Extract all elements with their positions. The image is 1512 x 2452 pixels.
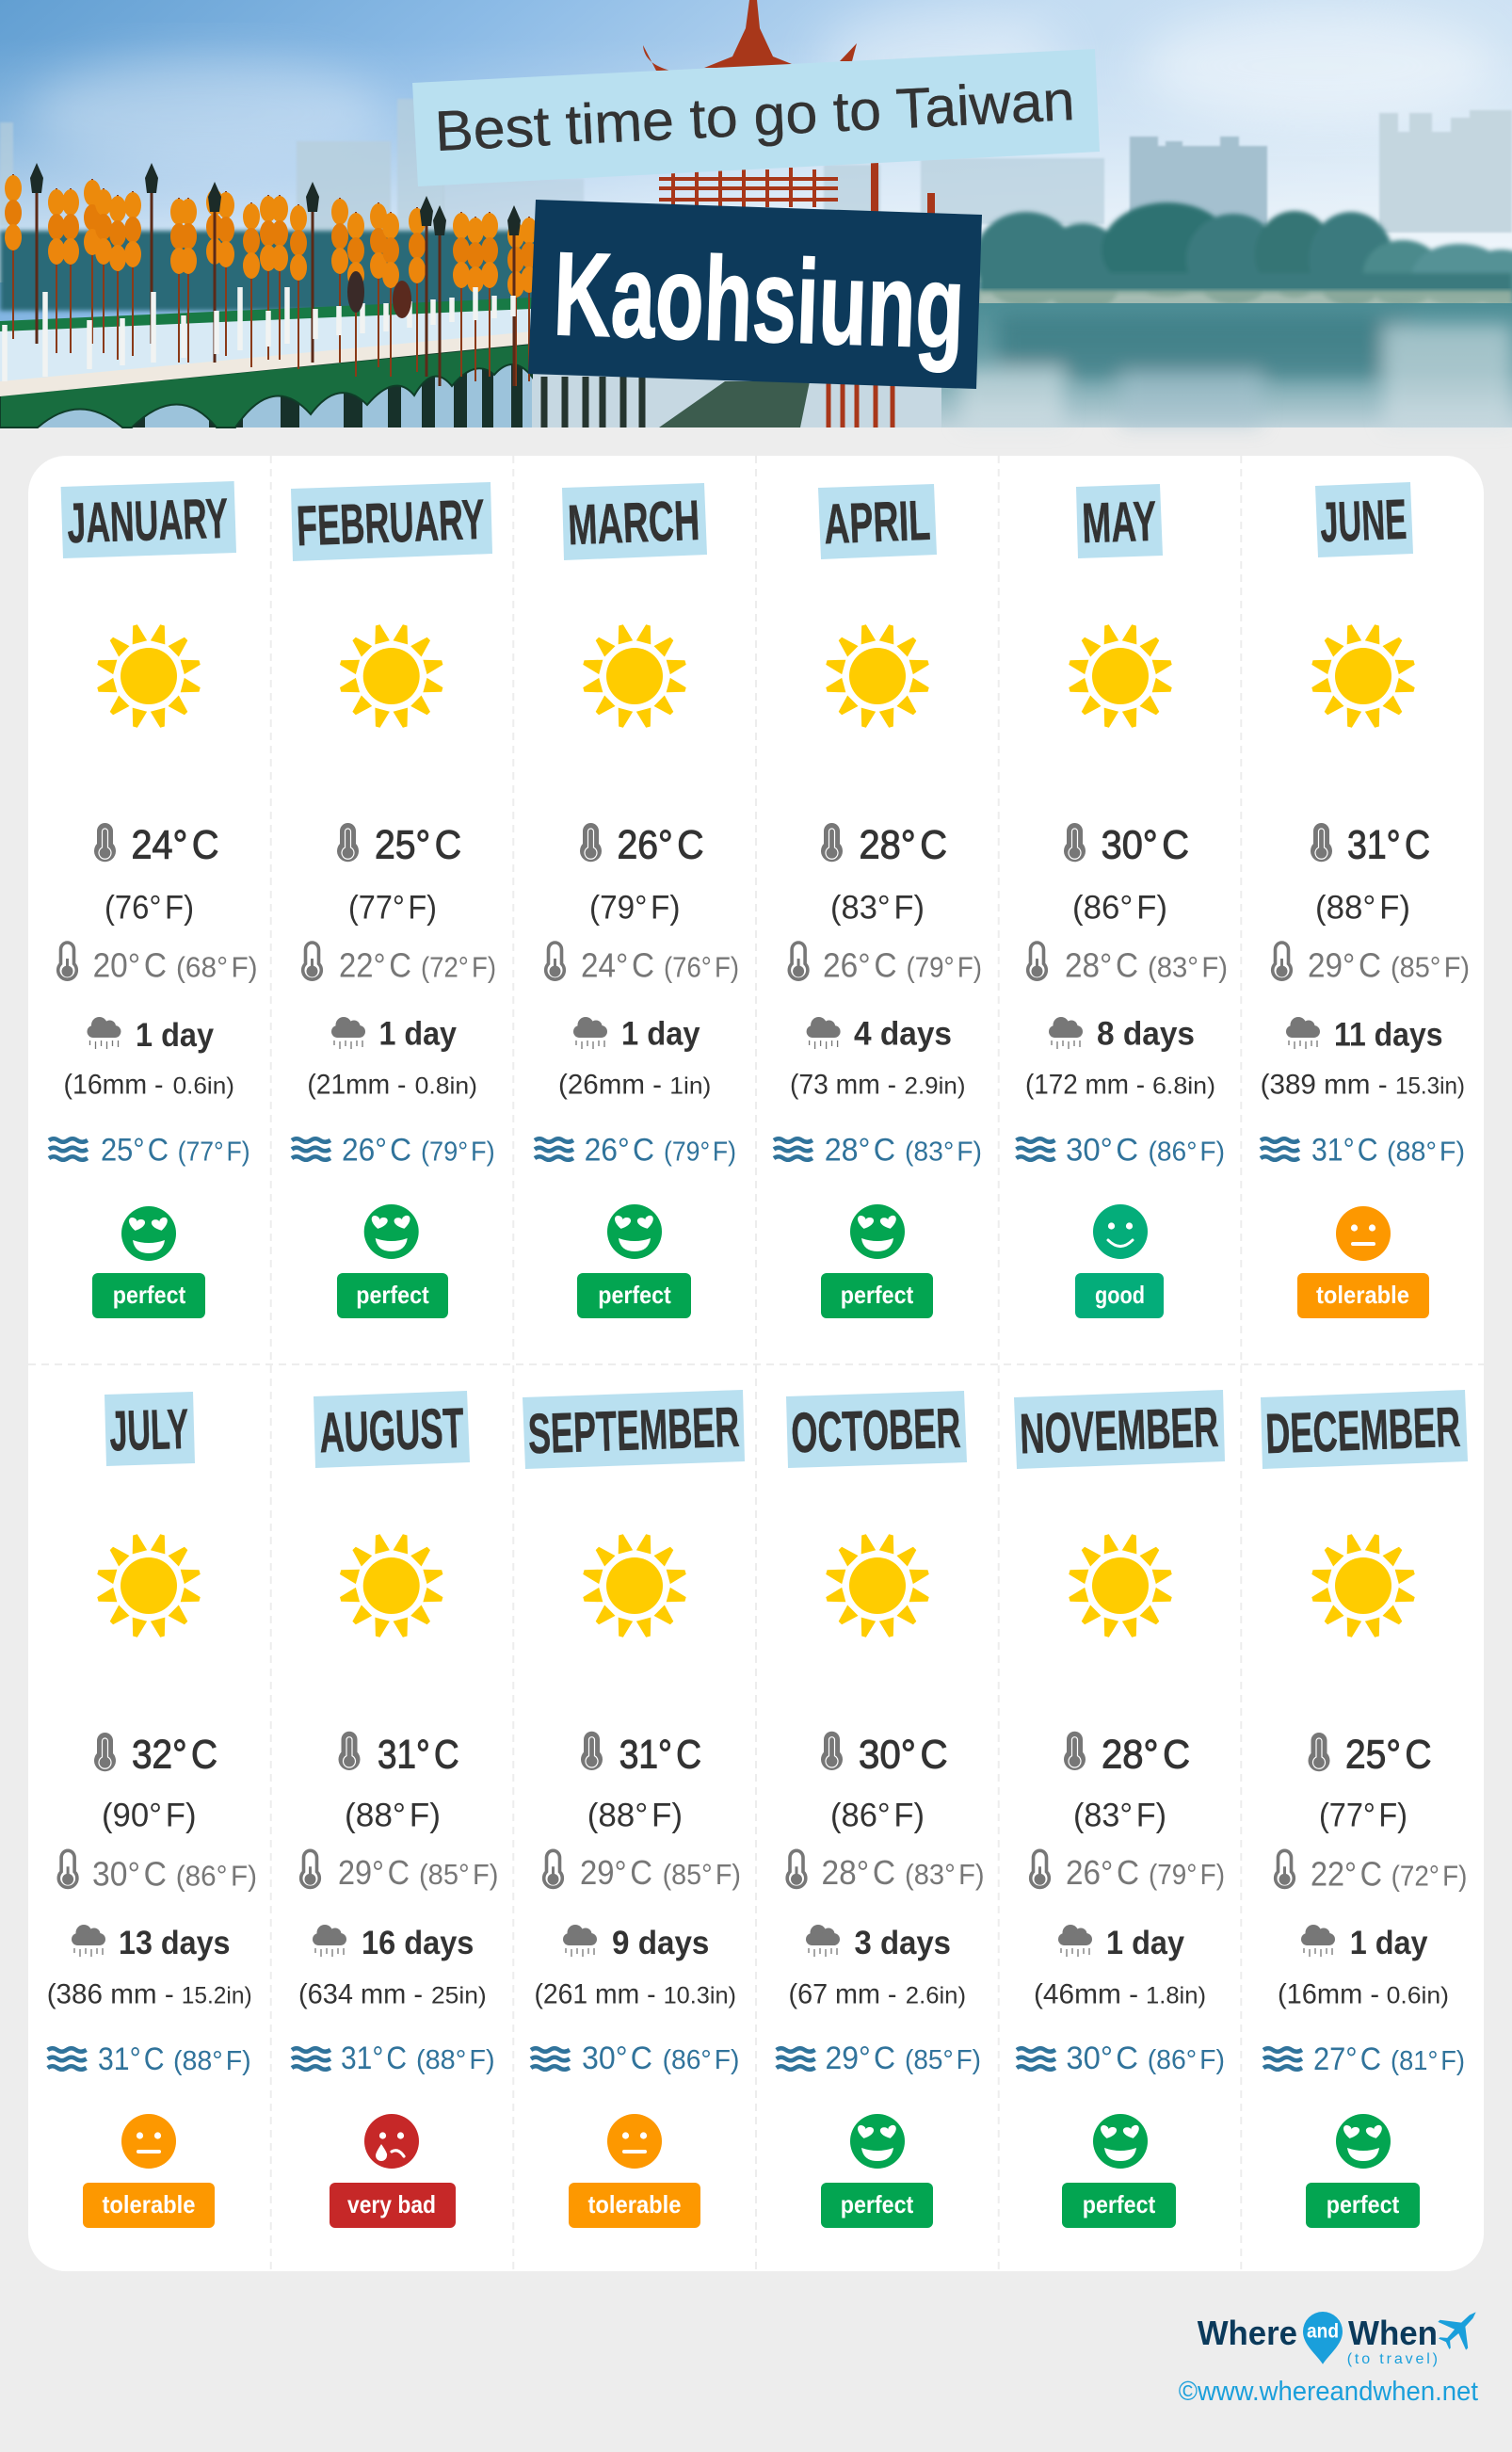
trees across the lake — [974, 202, 1512, 314]
title banner: Best time to go to Taiwan: Best time to go to Taiwan — [433, 69, 1076, 163]
rainfall: 0.6in) — [173, 1073, 234, 1100]
low temperature: 28° C — [821, 1853, 895, 1892]
rainfall — [535, 1979, 736, 2010]
high temperature: 28° C — [1102, 1733, 1190, 1778]
column: March — [535, 483, 739, 1318]
rating face: perfect — [121, 1206, 176, 1261]
rating face: perfect — [850, 1204, 905, 1259]
column: September — [523, 1390, 745, 2228]
low temperature — [58, 1850, 257, 1894]
rating badge: perfect: perfect — [841, 2190, 914, 2218]
rainfall: 6.8in) — [1152, 1073, 1215, 1100]
icon: sun — [1068, 1533, 1173, 1638]
water under the arched bridge — [0, 358, 532, 427]
high temperature: 25° C — [375, 823, 461, 868]
high temperature fahrenheit: (79° F) — [589, 889, 680, 927]
rating badge: tolerable — [1297, 1273, 1429, 1318]
rainfall — [1278, 1979, 1449, 2010]
railing posts — [5, 287, 513, 381]
rainfall: (389 mm - — [1261, 1070, 1388, 1101]
sea temperature — [535, 1133, 736, 1169]
high temperature — [1064, 823, 1189, 868]
sea temperature: 26° C — [342, 1133, 411, 1169]
rainy days: 11 days — [1334, 1017, 1442, 1054]
month: February — [291, 482, 492, 561]
high temperature — [339, 1732, 459, 1778]
sea temperature: (88° F) — [173, 2046, 251, 2076]
low temperature: 30° C — [92, 1855, 167, 1894]
low temperature: 28° C — [1065, 945, 1138, 985]
rainy days — [1301, 1925, 1428, 1961]
month: February: FEBRUARY — [296, 488, 486, 557]
low temperature: 22° C — [1311, 1855, 1382, 1894]
month: September: SEPTEMBER — [527, 1395, 740, 1465]
high temperature fahrenheit: (86° F) — [1072, 889, 1167, 927]
icon: sun — [825, 1533, 930, 1638]
icon: sun — [339, 623, 444, 729]
high temperature — [1311, 823, 1430, 868]
rating badge: perfect — [1062, 2183, 1176, 2228]
month: October: OCTOBER — [790, 1396, 961, 1464]
pagoda reflection and lake centre — [527, 372, 941, 427]
rainy days: 9 days — [612, 1925, 709, 1961]
low temperature: (83° F) — [1148, 951, 1228, 983]
month: March: MARCH — [567, 489, 700, 557]
high temperature fahrenheit: (90° F) — [102, 1797, 196, 1833]
rating badge: perfect — [821, 1273, 933, 1318]
rating badge: perfect — [337, 1273, 448, 1318]
rainfall: 25in) — [431, 1983, 487, 2009]
low temperature: (72° F) — [1391, 1860, 1467, 1893]
month: June: JUNE — [1319, 488, 1407, 554]
low temperature: 26° C — [1066, 1853, 1139, 1892]
column: January — [49, 481, 258, 1318]
month: May: MAY — [1081, 490, 1157, 555]
rainfall: 1in) — [669, 1073, 711, 1100]
icon: sun — [96, 623, 201, 729]
logo: Where and When (to travel) — [1198, 2298, 1490, 2367]
rainy days — [87, 1017, 214, 1054]
month: November — [1014, 1390, 1225, 1469]
sea temperature: 30° C — [582, 2041, 652, 2076]
high temperature fahrenheit: (88° F) — [587, 1797, 683, 1833]
sea temperature: (85° F) — [905, 2045, 981, 2075]
rainy days — [1058, 1925, 1184, 1961]
high temperature — [1309, 1733, 1431, 1778]
rating badge: perfect — [577, 1273, 691, 1318]
rainfall: 15.2in) — [182, 1983, 252, 2009]
high temperature — [1064, 1732, 1190, 1778]
logo: Where and When (to travel): Where — [1198, 2314, 1297, 2352]
rainfall: (46mm - — [1034, 1979, 1138, 2010]
title banner: Best time to go to Taiwan — [412, 49, 1100, 186]
rainfall: (21mm - — [307, 1070, 406, 1101]
rainy days: 16 days — [362, 1925, 474, 1961]
high temperature: 30° C — [859, 1733, 948, 1778]
low temperature — [58, 943, 258, 985]
icon: sun — [339, 1533, 444, 1638]
rainy days — [1049, 1015, 1195, 1052]
month: July — [105, 1392, 195, 1466]
rating badge: good — [1075, 1273, 1164, 1318]
rainfall: (26mm - — [558, 1070, 662, 1101]
main panel — [28, 456, 1484, 2271]
rainfall — [298, 1979, 487, 2010]
rainy days: 1 day — [136, 1017, 214, 1054]
icon: sun — [582, 1533, 687, 1638]
rainy days — [807, 1015, 952, 1052]
high temperature fahrenheit: (77° F) — [348, 889, 437, 927]
high temperature fahrenheit: (76° F) — [105, 889, 194, 927]
rating face: perfect — [1336, 2114, 1391, 2169]
sea temperature — [774, 1133, 982, 1169]
low temperature — [301, 1850, 499, 1892]
icon: sun — [825, 623, 930, 729]
logo: Where and When (to travel): and — [1307, 2321, 1339, 2343]
low temperature: (85° F) — [1391, 951, 1470, 983]
sea temperature: 31° C — [1311, 1133, 1378, 1169]
rating badge: perfect — [92, 1273, 205, 1318]
low temperature: (85° F) — [663, 1858, 741, 1891]
sea temperature: 31° C — [341, 2041, 407, 2076]
column: May — [1017, 484, 1228, 1318]
column: August — [292, 1391, 499, 2228]
rainfall — [790, 1070, 966, 1101]
sea temperature — [49, 1133, 250, 1169]
rainfall: 2.9in) — [904, 1073, 966, 1100]
logo: Where and When (to travel): When — [1348, 2314, 1438, 2352]
sea temperature — [777, 2041, 981, 2076]
rainy days — [72, 1925, 230, 1961]
low temperature: (79° F) — [906, 951, 982, 983]
rainfall — [64, 1070, 234, 1101]
high temperature: 30° C — [1102, 823, 1189, 868]
rating face: perfect — [364, 1204, 419, 1259]
high temperature — [821, 1732, 948, 1778]
rating badge: tolerable: tolerable — [102, 2190, 196, 2218]
rainfall: 10.3in) — [664, 1983, 736, 2009]
rating face: good — [1093, 1204, 1148, 1259]
website credit: ©www.whereandwhen.net — [1179, 2377, 1478, 2407]
month: August — [314, 1391, 470, 1468]
rainfall: (16mm - — [64, 1070, 164, 1101]
month: August: AUGUST — [318, 1396, 465, 1464]
sea temperature: (88° F) — [1387, 1137, 1465, 1168]
rainfall — [307, 1070, 477, 1101]
month: March — [562, 483, 707, 560]
icon: sun — [582, 623, 687, 729]
rating face: tolerable — [121, 2114, 176, 2169]
rating badge: tolerable: tolerable — [1316, 1281, 1409, 1309]
rating badge: tolerable — [569, 2183, 700, 2228]
low temperature: 29° C — [1308, 945, 1381, 985]
sea temperature — [1017, 1133, 1225, 1169]
rating badge: tolerable: tolerable — [587, 2190, 682, 2218]
rating badge: good: good — [1095, 1281, 1145, 1309]
rating badge: tolerable — [83, 2183, 215, 2228]
column: November — [1014, 1390, 1225, 2228]
high temperature: 31° C — [1347, 823, 1430, 868]
month: October — [786, 1391, 967, 1468]
low temperature: 24° C — [581, 945, 654, 985]
sea temperature: 30° C — [1066, 1133, 1138, 1169]
rating badge: perfect: perfect — [356, 1281, 429, 1309]
rainfall — [558, 1070, 711, 1101]
month: July: JULY — [108, 1397, 189, 1462]
high temperature — [581, 1732, 701, 1778]
sea temperature: 31° C — [98, 2041, 164, 2077]
icon: sun — [96, 1533, 201, 1638]
high temperature — [94, 1733, 217, 1778]
month: April — [818, 484, 937, 559]
icon: sun — [1311, 1533, 1416, 1638]
low temperature: 29° C — [338, 1853, 410, 1892]
rating face: very bad — [364, 2114, 419, 2169]
sea temperature — [1263, 2041, 1465, 2077]
rating face: tolerable — [607, 2114, 662, 2169]
rainfall: (73 mm - — [790, 1070, 896, 1101]
low temperature — [1031, 1850, 1225, 1892]
rating badge: very bad — [330, 2183, 456, 2228]
low temperature: 26° C — [823, 945, 897, 985]
high temperature fahrenheit: (77° F) — [1319, 1797, 1407, 1833]
sea temperature: (86° F) — [1149, 1137, 1225, 1168]
column: July — [47, 1392, 257, 2228]
header photo: Lotus Pond, Kaohsiung — [0, 0, 1512, 427]
low temperature: (79° F) — [1149, 1858, 1225, 1891]
rainfall — [789, 1979, 966, 2010]
sea temperature — [292, 1133, 495, 1169]
high temperature fahrenheit: (88° F) — [1315, 889, 1410, 927]
rainy days: 13 days — [119, 1925, 230, 1961]
month: November: NOVEMBER — [1019, 1395, 1219, 1465]
sea temperature: (79° F) — [664, 1137, 736, 1168]
low temperature — [787, 1850, 985, 1892]
sea temperature — [1261, 1133, 1465, 1169]
street lamps — [30, 163, 521, 386]
rainfall: 0.6in) — [1387, 1983, 1449, 2009]
high temperature: 28° C — [859, 823, 947, 868]
lanterns — [5, 174, 538, 386]
low temperature — [1273, 943, 1470, 985]
month: April: APRIL — [823, 489, 931, 556]
rainfall: (16mm - — [1278, 1979, 1379, 2010]
rainy days: 4 days — [854, 1015, 952, 1052]
icon: sun — [1068, 623, 1173, 729]
icon: sun — [1311, 623, 1416, 729]
sea temperature: (86° F) — [663, 2045, 739, 2075]
sea temperature: 30° C — [1066, 2041, 1138, 2076]
rainy days — [1286, 1017, 1442, 1054]
rating badge: perfect: perfect — [841, 1281, 914, 1309]
pagoda — [643, 0, 935, 217]
rating badge: perfect — [1306, 2183, 1420, 2228]
rating badge: perfect: perfect — [1083, 2190, 1156, 2218]
month: January — [61, 481, 236, 558]
sea temperature: (88° F) — [416, 2045, 495, 2075]
sea temperature: 26° C — [585, 1133, 654, 1169]
high temperature — [580, 823, 704, 868]
rainfall: 15.3in) — [1395, 1073, 1465, 1100]
rainfall — [1261, 1070, 1465, 1101]
rainy days — [563, 1925, 709, 1961]
sea temperature: 28° C — [825, 1133, 895, 1169]
month: May — [1076, 484, 1163, 558]
high temperature: 26° C — [618, 823, 704, 868]
high temperature — [94, 823, 218, 868]
low temperature: (76° F) — [664, 951, 739, 983]
sea temperature: 25° C — [101, 1133, 169, 1169]
sea temperature — [531, 2041, 739, 2076]
rainy days: 1 day — [378, 1015, 457, 1053]
low temperature — [1028, 943, 1228, 985]
sea temperature: (79° F) — [421, 1137, 495, 1168]
high temperature: 25° C — [1345, 1733, 1431, 1778]
sea temperature: (86° F) — [1148, 2045, 1225, 2075]
rainfall — [47, 1979, 252, 2010]
column: December — [1261, 1390, 1468, 2228]
month: June — [1315, 482, 1413, 557]
low temperature: (72° F) — [421, 951, 496, 983]
column: October — [777, 1391, 985, 2228]
rainfall: 1.8in) — [1146, 1983, 1206, 2009]
rating badge: perfect: perfect — [1327, 2190, 1400, 2218]
rating face: perfect — [1093, 2114, 1148, 2169]
column: June — [1261, 482, 1470, 1318]
rating badge: perfect — [821, 2183, 933, 2228]
low temperature — [546, 943, 739, 985]
high temperature fahrenheit: (86° F) — [830, 1797, 925, 1833]
sea temperature — [292, 2041, 495, 2076]
icon: map pin — [1303, 2312, 1343, 2364]
sea temperature — [1017, 2041, 1225, 2076]
high temperature: 31° C — [378, 1733, 459, 1778]
low temperature: (83° F) — [905, 1858, 985, 1891]
rainy days: 3 days — [855, 1925, 951, 1961]
rating face: perfect — [850, 2114, 905, 2169]
rating badge: perfect: perfect — [113, 1281, 186, 1309]
rainfall: (67 mm - — [789, 1979, 896, 2010]
rainfall: (261 mm - — [535, 1979, 655, 2010]
low temperature: (86° F) — [176, 1860, 257, 1893]
logo: Where and When (to travel): (to travel) — [1347, 2351, 1438, 2367]
high temperature: 31° C — [619, 1733, 701, 1778]
rainy days: 1 day — [1350, 1925, 1428, 1961]
low temperature: 29° C — [580, 1853, 652, 1892]
rainfall: 0.8in) — [415, 1073, 477, 1100]
rainy days — [573, 1015, 700, 1052]
column: February — [291, 482, 496, 1318]
high temperature fahrenheit: (88° F) — [345, 1797, 441, 1833]
low temperature — [1276, 1850, 1467, 1894]
low temperature: (85° F) — [419, 1858, 499, 1891]
rainy days — [806, 1925, 951, 1961]
month: September — [523, 1390, 745, 1469]
low temperature: (68° F) — [176, 951, 258, 983]
rainfall: (634 mm - — [298, 1979, 423, 2010]
rainy days — [313, 1925, 474, 1961]
sea temperature: 29° C — [825, 2041, 895, 2076]
rainy days: 1 day — [1106, 1925, 1184, 1961]
rainy days: 8 days — [1097, 1015, 1195, 1052]
sea temperature — [48, 2041, 251, 2077]
rating badge: very bad: very bad — [347, 2190, 436, 2218]
sea temperature: (83° F) — [905, 1137, 982, 1168]
high temperature fahrenheit: (83° F) — [1073, 1797, 1166, 1833]
month: January: JANUARY — [66, 487, 229, 555]
low temperature: 20° C — [93, 945, 167, 985]
column: April — [774, 484, 982, 1318]
high temperature: 24° C — [132, 823, 218, 868]
rainfall — [1034, 1979, 1206, 2010]
low temperature — [544, 1850, 741, 1892]
sea temperature: (77° F) — [178, 1137, 250, 1168]
rainy days — [331, 1015, 457, 1053]
rainy days: 1 day — [621, 1015, 700, 1052]
bridge deck — [0, 303, 532, 391]
sea temperature: (81° F) — [1391, 2046, 1465, 2076]
high temperature — [821, 823, 947, 868]
rainfall: 2.6in) — [906, 1983, 966, 2009]
title banner: Kaohsiung: Kaohsiung — [552, 227, 967, 373]
icon: plane — [1430, 2298, 1490, 2358]
rating face: tolerable — [1336, 1206, 1391, 1261]
rating face: perfect — [607, 1204, 662, 1259]
rainfall — [1025, 1070, 1215, 1101]
low temperature — [789, 943, 982, 985]
low temperature: 22° C — [339, 945, 411, 985]
rainfall: (386 mm - — [47, 1979, 174, 2010]
low temperature — [303, 943, 496, 985]
sea temperature: 27° C — [1313, 2041, 1381, 2077]
high temperature fahrenheit: (83° F) — [830, 889, 925, 927]
rainfall: (172 mm - — [1025, 1070, 1145, 1101]
rating badge: perfect: perfect — [598, 1281, 671, 1309]
high temperature: 32° C — [132, 1733, 217, 1778]
title banner: Kaohsiung — [528, 200, 982, 389]
high temperature — [337, 823, 461, 868]
